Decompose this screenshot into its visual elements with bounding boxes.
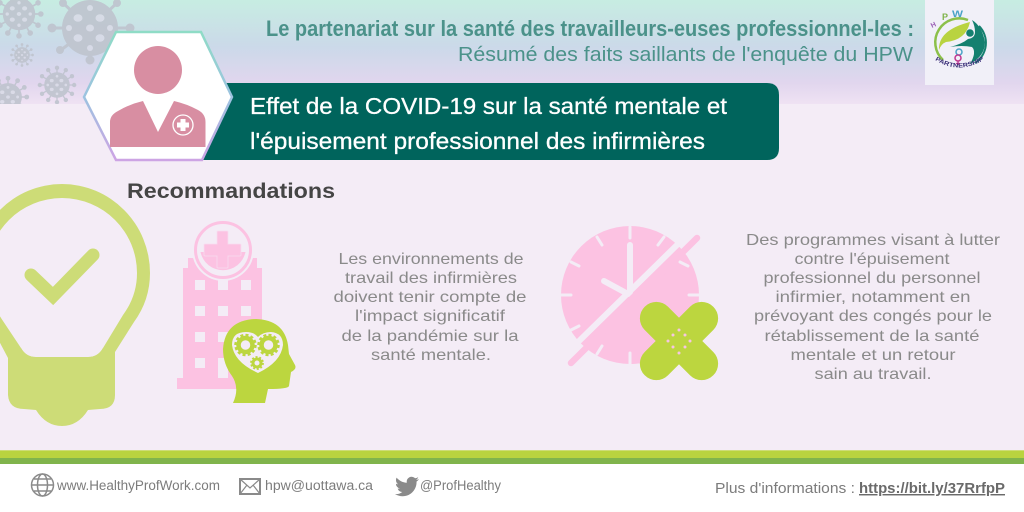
logo: HPW Partnership	[925, 0, 994, 85]
icon: medical cross badge	[173, 115, 193, 135]
heading: recommendations: Recommandations	[127, 180, 335, 203]
text block: second recommendation: contre l'épuisement	[794, 251, 950, 268]
icon: nurse head	[134, 46, 182, 94]
icons: coronavirus decoration	[0, 0, 134, 104]
logo: HPW Partnership: PARTNERSHIP	[936, 56, 983, 68]
text block: second recommendation: professionnel du personnel	[764, 270, 980, 287]
title banner	[200, 83, 779, 160]
icon: clock with bandage	[561, 226, 725, 387]
twitter handle: @ProfHealthy	[420, 478, 501, 493]
text block: first recommendation: doivent tenir compte de	[334, 289, 527, 306]
text block: second recommendation: infirmier, notamment en	[776, 289, 970, 306]
more information link: Plus d'informations :	[715, 481, 855, 497]
subheading: survey summary: Résumé des faits saillants de l'enquête du HPW	[458, 44, 913, 66]
footer band	[0, 450, 1024, 512]
text block: first recommendation: de la pandémie sur la	[342, 328, 519, 345]
email: hpw@uottawa.ca	[265, 478, 374, 493]
text block: first recommendation	[334, 251, 527, 364]
icon: hospital building	[177, 219, 262, 389]
text block: second recommendation: prévoyant des congés pour le	[754, 308, 992, 325]
icon: twitter bird	[395, 477, 419, 496]
more information link	[715, 481, 1005, 497]
text block: second recommendation	[746, 232, 1001, 383]
hexagon nurse badge	[84, 32, 232, 160]
heading: partnership title: Le partenariat sur la santé des travailleurs-euses professionnel-les :	[266, 16, 914, 41]
icon: light bulb with check	[0, 184, 150, 426]
more information link: https://bit.ly/37RrfpP	[859, 481, 1005, 497]
text block: second recommendation: mentale et un retour	[790, 347, 956, 364]
text block: first recommendation: santé mentale.	[371, 347, 491, 364]
text block: second recommendation: Des programmes visant à lutter	[746, 232, 1001, 249]
icon: globe	[32, 474, 54, 496]
website: www.HealthyProfWork.com	[56, 478, 220, 493]
header gradient band	[0, 0, 1024, 104]
text block: second recommendation: rétablissement de la santé	[764, 328, 980, 345]
logo: HPW Partnership: W	[952, 9, 964, 19]
icon: envelope	[240, 479, 260, 494]
text block: first recommendation: travail des infirmières	[345, 270, 517, 287]
banner title line 2: l'épuisement professionnel des infirmières	[250, 128, 705, 154]
text block: second recommendation: sain au travail.	[814, 366, 932, 383]
logo: HPW Partnership: H	[930, 21, 937, 30]
text block: first recommendation: l'impact significatif	[355, 308, 506, 325]
icon: head with gears in heart	[223, 319, 296, 403]
icon: nurse body	[110, 101, 206, 147]
logo: HPW Partnership: P	[942, 12, 948, 22]
banner title line 1: Effet de la COVID-19 sur la santé mentale et	[250, 93, 728, 119]
text block: first recommendation: Les environnements de	[338, 251, 524, 268]
